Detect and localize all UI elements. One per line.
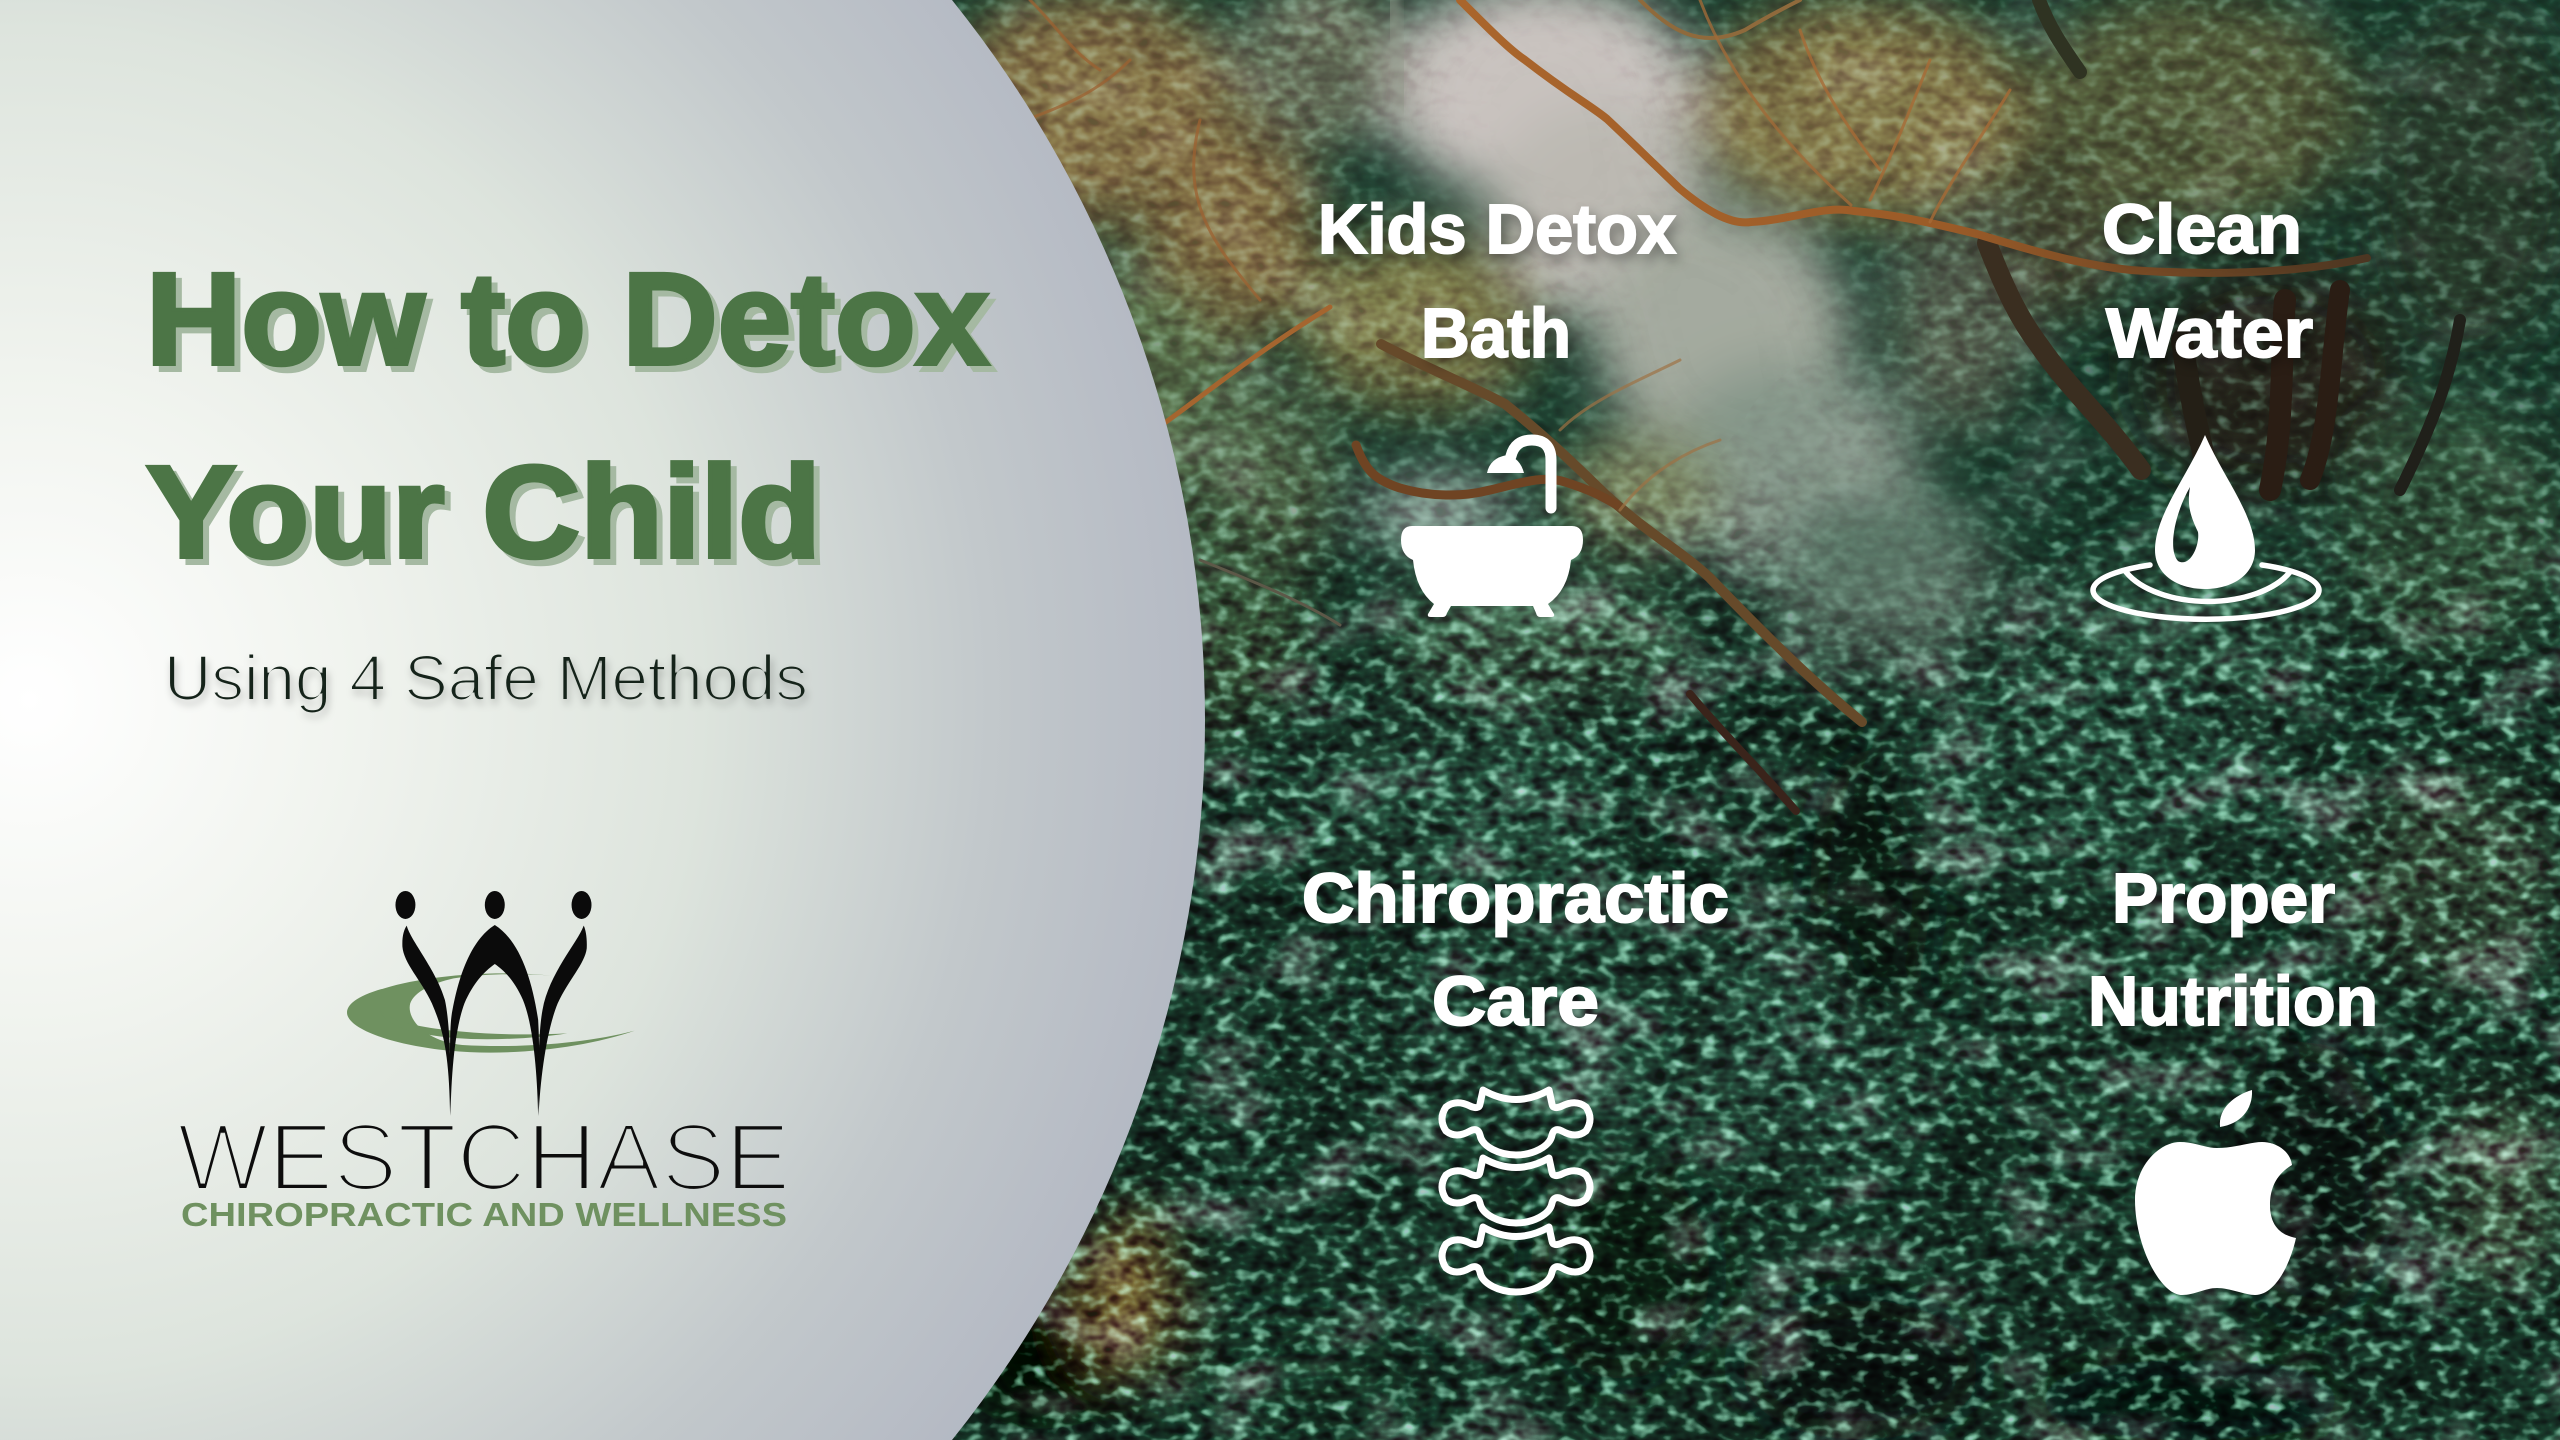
label: proper nutrition: Proper [2112,859,2335,937]
logo: Westchase Chiropractic and Wellness [177,891,790,1233]
method: clean water [2093,190,2319,619]
forest photo background [952,0,2560,1440]
title: How to Detox [146,245,989,392]
label: clean water: Clean [2102,190,2302,268]
method: chiropractic care [1302,859,1729,1292]
title [146,245,989,585]
label: kids detox bath: Bath [1421,294,1571,372]
label: chiropractic care [1302,859,1729,1040]
logo wordmark: WESTCHASE [177,1104,790,1211]
icon: bathtub with shower [1401,440,1583,617]
label: proper nutrition [2088,859,2378,1040]
label: kids detox bath: Kids Detox [1318,190,1676,268]
title: Your Child [146,438,821,585]
logo tagline: CHIROPRACTIC AND WELLNESS [181,1196,787,1233]
icon: spine vertebrae [1442,1090,1590,1292]
logo mark: three figures and swoosh [347,891,635,1116]
label: kids detox bath [1318,190,1676,372]
label: clean water [2102,190,2313,372]
icon: water drop with ripples [2093,435,2319,619]
method: kids detox bath [1318,190,1676,617]
method: proper nutrition [2088,859,2378,1295]
label: proper nutrition: Nutrition [2088,962,2378,1040]
label: chiropractic care: Chiropractic [1302,859,1729,937]
panel: left circle [0,0,1205,1440]
subtitle: Using 4 Safe Methods [164,642,808,714]
label: clean water: Water [2106,294,2313,372]
icon: apple [2135,1090,2296,1295]
label: chiropractic care: Care [1432,962,1599,1040]
